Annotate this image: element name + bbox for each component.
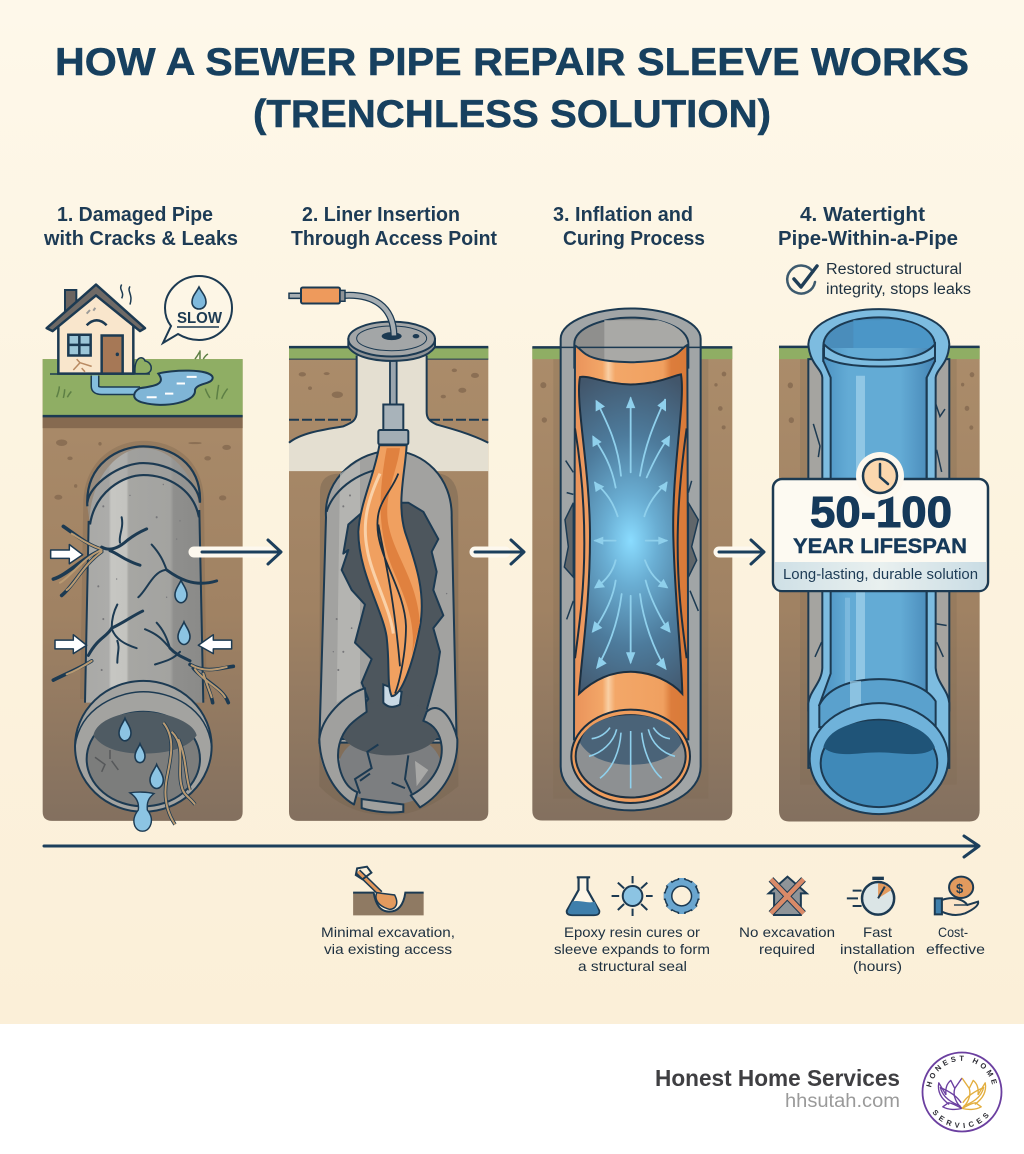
text: no excavation: No excavation — [739, 924, 835, 940]
heading: step 4 — [778, 204, 958, 250]
speech bubble: slow drain: SLOW — [177, 310, 223, 327]
text: epoxy resin: sleeve expands to form — [554, 941, 710, 957]
callout: lifespan badge — [773, 479, 988, 591]
logo: HONEST HOME — [926, 1056, 997, 1088]
footer band — [0, 1024, 1024, 1154]
coin dollar sign: $ — [956, 881, 964, 896]
access cover, hose and rod — [289, 287, 435, 445]
logo — [922, 1052, 1002, 1132]
title: HOW A SEWER PIPE REPAIR SLEEVE WORKS — [55, 41, 969, 84]
ground — [779, 347, 980, 821]
orange liner — [358, 445, 422, 707]
water drops — [119, 580, 190, 831]
callout: lifespan badge: YEAR LIFESPAN — [793, 535, 967, 558]
heading: step 2: 2. Liner Insertion — [302, 204, 460, 226]
logo: SERVICES — [932, 1110, 988, 1128]
text: minimal excavation — [321, 924, 455, 957]
text: restored integrity: integrity, stops leaks — [826, 281, 971, 298]
text: minimal excavation: Minimal excavation, — [321, 924, 455, 940]
title: (TRENCHLESS SOLUTION) — [253, 93, 771, 136]
broken host pipe — [319, 451, 457, 812]
icon: stopwatch — [847, 877, 894, 915]
heading: step 4: Pipe-Within-a-Pipe — [778, 228, 958, 250]
footer brand text: Honest Home Services — [655, 1065, 900, 1091]
heading: step 1 — [43, 204, 238, 250]
text: fast installation: installation — [840, 941, 915, 957]
text: restored integrity — [826, 261, 971, 298]
icon: no excavation — [769, 877, 807, 915]
panel: step 3 inflation and curing — [532, 308, 764, 821]
speech bubble: slow drain — [163, 276, 232, 343]
outer host pipe — [561, 308, 701, 810]
icon: sun — [612, 876, 653, 916]
icon: clock — [856, 452, 904, 500]
text: epoxy resin: a structural seal — [578, 958, 687, 974]
ground cross-section — [43, 350, 243, 821]
timeline arrow — [44, 836, 979, 857]
arrow: step 3 to 4 — [719, 540, 764, 564]
text: epoxy resin — [554, 924, 710, 974]
heading: step 4: 4. Watertight — [800, 204, 925, 226]
panel: step 2 liner insertion — [289, 287, 524, 821]
heading: step 1: 1. Damaged Pipe — [57, 204, 213, 226]
pressure arrows — [51, 545, 232, 654]
sleeve opening — [810, 703, 948, 814]
text: cost-effective — [926, 924, 985, 957]
title — [55, 41, 969, 136]
front opening — [75, 681, 212, 812]
callout: lifespan badge: 50-100 — [810, 488, 952, 537]
ground and excavation — [289, 347, 488, 821]
old pipe shell — [808, 359, 949, 711]
orange liner — [574, 345, 688, 739]
text: cost-effective: effective — [926, 941, 985, 957]
roots and cracks — [53, 517, 233, 703]
text: no excavation — [739, 924, 835, 957]
icon: hand with coin — [935, 877, 978, 915]
arrow: step 2 to 3 — [475, 540, 524, 564]
text: minimal excavation: via existing access — [324, 941, 452, 957]
text: cost-effective: Cost- — [938, 924, 968, 940]
heading: step 3: 3. Inflation and — [553, 204, 693, 226]
heading: step 3: Curing Process — [563, 228, 705, 250]
icon: leaking water puddle — [95, 371, 213, 405]
footer brand text — [655, 1065, 900, 1112]
liner opening — [571, 710, 690, 803]
text: no excavation: required — [759, 941, 815, 957]
text: epoxy resin: Epoxy resin cures or — [564, 924, 700, 940]
panel: step 4 watertight pipe — [773, 261, 988, 821]
icon: minimal excavation shovel — [353, 867, 424, 915]
icon: check mark — [787, 266, 817, 294]
icon: flask — [567, 877, 599, 915]
heading: step 3 — [553, 204, 705, 250]
text: fast installation: (hours) — [853, 958, 902, 974]
cracked concrete pipe — [53, 441, 233, 824]
text: fast installation: Fast — [863, 924, 892, 940]
heading: step 2 — [291, 204, 497, 250]
footer brand text: hhsutah.com — [785, 1091, 900, 1112]
icon: gear — [664, 878, 700, 914]
text: restored integrity: Restored structural — [826, 261, 962, 278]
inflating air arrows — [575, 374, 687, 694]
blue sleeve — [808, 309, 949, 768]
callout: lifespan badge: Long-lasting, durable solution — [783, 566, 978, 583]
arrow: step 1 to 2 — [194, 540, 281, 564]
icon: damaged house — [47, 285, 151, 374]
ground — [532, 347, 732, 821]
heading: step 1: with Cracks & Leaks — [43, 228, 238, 250]
text: fast installation — [840, 924, 915, 974]
panel: step 1 damaged pipe — [43, 276, 281, 831]
heading: step 2: Through Access Point — [291, 228, 497, 250]
